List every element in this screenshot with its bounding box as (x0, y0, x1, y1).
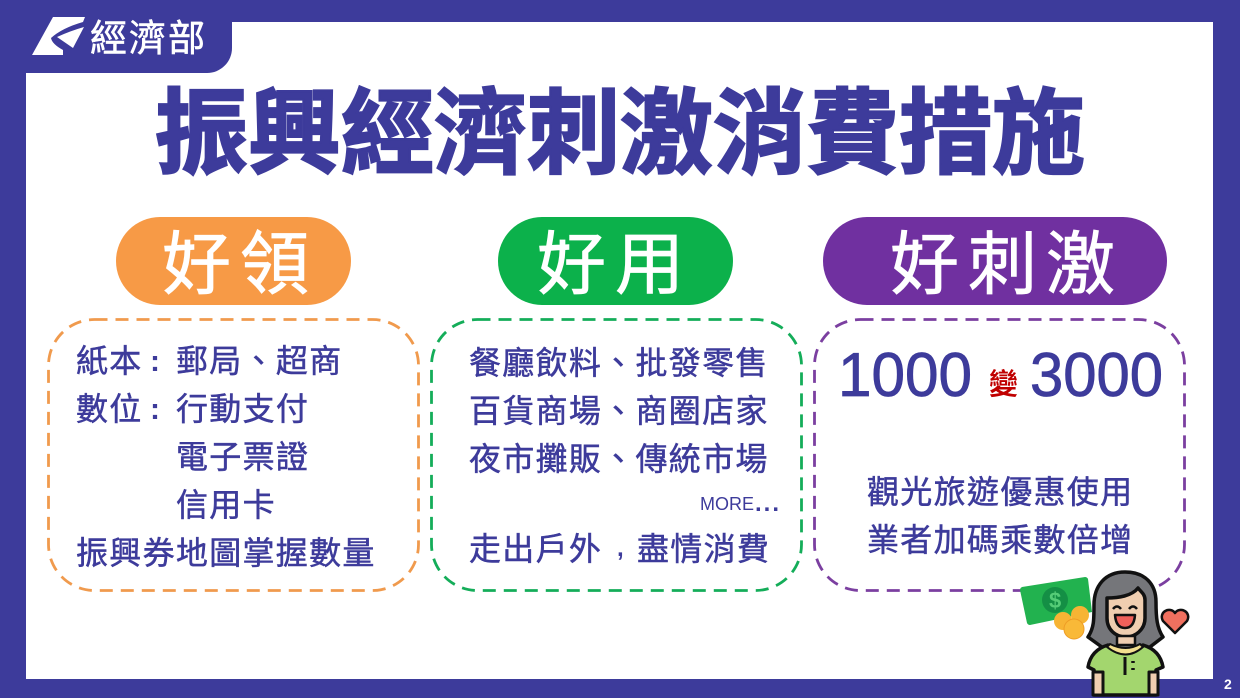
dashed box (432, 320, 802, 590)
pill heading: 好刺激 (823, 217, 1167, 305)
pill heading: 好領: 好領 (162, 226, 318, 303)
icon: money and coins (1020, 577, 1092, 639)
text block: 百貨商場、商圈店家 (469, 393, 769, 429)
pill heading: 好用: 好用 (537, 226, 693, 303)
text block: : (150, 345, 160, 378)
text block: 餐廳飲料、批發零售 (469, 345, 769, 381)
text block: 紙本 (76, 343, 143, 379)
logo tab (0, 0, 232, 73)
text block: 行動支付 (176, 391, 309, 427)
icon: money and coins: $ (1049, 588, 1061, 613)
number comparison: 變 (989, 368, 1018, 401)
panel: 好用 (432, 217, 802, 590)
text block: 夜市攤販、傳統市場 (469, 441, 769, 477)
text block: , (617, 535, 624, 562)
text block (867, 474, 1133, 558)
text block: 業者加碼乘數倍增 (867, 522, 1133, 558)
logo wordmark: 經濟部 (90, 18, 207, 59)
panel: 好領 (48, 217, 418, 590)
icon: ministry logo (32, 17, 85, 55)
text block: MORE (700, 494, 754, 514)
text block: 振興券地圖掌握數量 (76, 535, 376, 571)
page number: 2 (1224, 676, 1232, 692)
number comparison (838, 341, 1163, 410)
text block: 電子票證 (176, 439, 309, 475)
text block: 觀光旅遊優惠使用 (867, 474, 1133, 510)
text block: 信用卡 (176, 487, 276, 523)
icon: heart (1162, 610, 1188, 633)
pill heading: 好領 (116, 217, 351, 305)
pill heading: 好用 (498, 217, 733, 305)
panel: 好刺激 (814, 217, 1184, 590)
text block (469, 345, 781, 567)
text block: 盡情消費 (637, 531, 770, 567)
number comparison: 1000 (838, 341, 972, 410)
dashed box (814, 320, 1184, 590)
text block: 郵局、超商 (176, 343, 343, 379)
icon: smiling woman (1088, 572, 1163, 695)
text block: 數位 (76, 391, 143, 427)
pill heading: 好刺激: 好刺激 (890, 226, 1124, 303)
text block (76, 343, 376, 571)
text block: : (150, 393, 160, 426)
text block: 走出戶外 (469, 531, 602, 567)
title: 振興經濟刺激消費措施 (155, 82, 1085, 186)
number comparison: 3000 (1030, 341, 1163, 410)
dashed box (48, 320, 418, 590)
text block: ... (755, 490, 781, 517)
